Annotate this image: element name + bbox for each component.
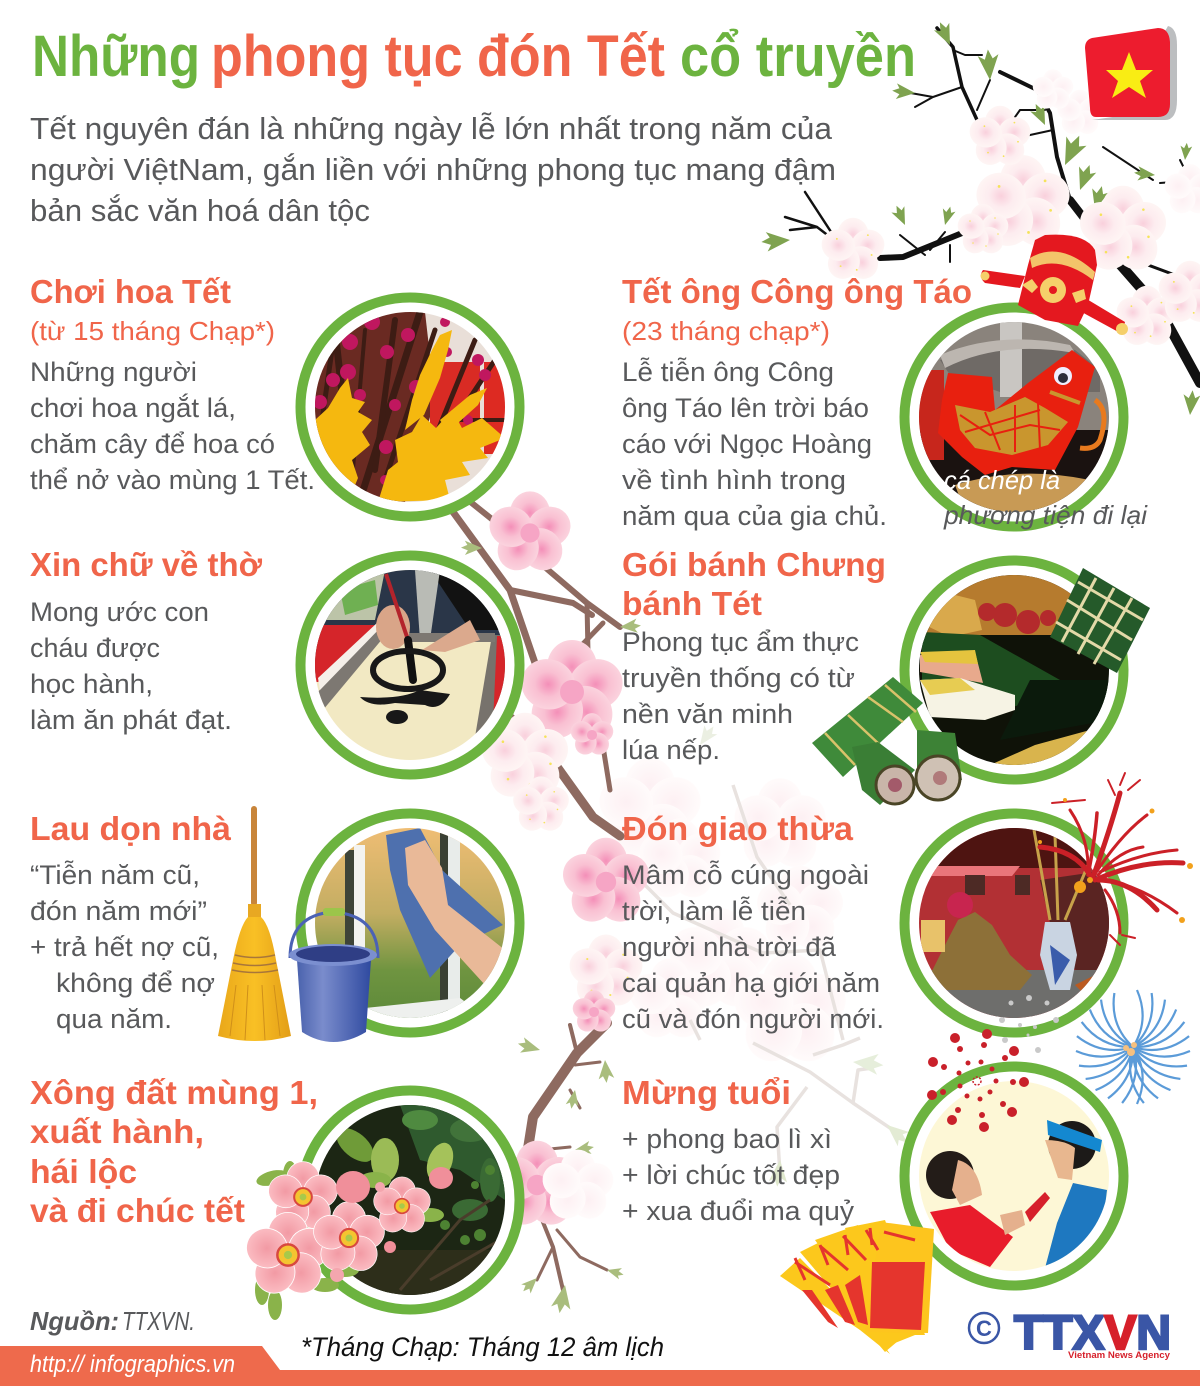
section: Lau dọn nhà: Lau dọn nhà <box>30 810 232 847</box>
section: Tết ông Công ông Táo: về tình hình trong <box>622 465 846 495</box>
section: Mừng tuổi: Mừng tuổi <box>622 1074 791 1111</box>
section: Lau dọn nhà: + trả hết nợ cũ, <box>30 932 219 962</box>
section: Tết ông Công ông Táo: Lễ tiễn ông Công <box>622 357 834 387</box>
footer band: http:// infographics.vn <box>30 1351 235 1378</box>
title: Những <box>32 24 200 89</box>
illustration: pink flowers <box>241 1161 453 1320</box>
section: Gói bánh Chưng bánh Tét: lúa nếp. <box>622 735 720 765</box>
section: Xin chữ về thờ: cháu được <box>30 633 160 663</box>
section: Mừng tuổi: + lời chúc tốt đẹp <box>622 1160 840 1190</box>
icon: red hat of ông Táo <box>980 235 1128 335</box>
section: Mừng tuổi: + phong bao lì xì <box>622 1124 832 1154</box>
section: Đón giao thừa: cũ và đón người mới. <box>622 1004 884 1034</box>
section: Xông đất mùng 1: Xông đất mùng 1, <box>30 1074 318 1111</box>
section: Đón giao thừa <box>622 810 884 1034</box>
section: Xin chữ về thờ: Xin chữ về thờ <box>30 546 263 583</box>
source <box>30 1306 195 1336</box>
title: cổ truyền <box>680 24 916 89</box>
footer band <box>0 1346 1200 1386</box>
section: Xin chữ về thờ: học hành, <box>30 669 153 699</box>
photo circle: bánh chưng <box>904 560 1124 780</box>
intro text: bản sắc văn hoá dân tộc <box>30 193 370 228</box>
section: Mừng tuổi: + xua đuổi ma quỷ <box>622 1196 855 1226</box>
section: Xông đất mùng 1: xuất hành, <box>30 1113 204 1150</box>
photo circle: cá chép <box>904 308 1124 526</box>
section: Xin chữ về thờ: làm ăn phát đạt. <box>30 705 232 735</box>
illustration: grey dots burst <box>999 995 1059 1053</box>
section: Gói bánh Chưng bánh Tét: bánh Tét <box>622 585 762 622</box>
central brown blossom branch <box>437 488 655 1314</box>
section: Chơi hoa Tết: chơi hoa ngắt lá, <box>30 393 236 423</box>
illustration: red dotted firework <box>927 1029 1029 1132</box>
title <box>32 24 916 89</box>
photo circle: hái lộc <box>300 1090 520 1310</box>
section: Lau dọn nhà: không để nợ <box>56 968 215 998</box>
section: Đón giao thừa: người nhà trời đã <box>622 932 836 962</box>
section: Xông đất mùng 1: hái lộc <box>30 1153 137 1190</box>
section: Đón giao thừa: trời, làm lễ tiễn <box>622 896 806 926</box>
section: Đón giao thừa: Mâm cỗ cúng ngoài <box>622 860 869 890</box>
section: Tết ông Công ông Táo: năm qua của gia chủ. <box>622 501 887 531</box>
icon: broom <box>218 806 291 1041</box>
section: Chơi hoa Tết: Chơi hoa Tết <box>30 273 231 310</box>
section: Chơi hoa Tết: (từ 15 tháng Chạp*) <box>30 316 275 346</box>
section: Xin chữ về thờ: Mong ước con <box>30 597 209 627</box>
icon: bánh chưng square <box>1050 568 1150 673</box>
logo: TTXVN: Vietnam News Agency <box>1068 1350 1171 1361</box>
section: Tết ông Công ông Táo: ông Táo lên trời báo <box>622 393 869 423</box>
section: Gói bánh Chưng bánh Tét: Gói bánh Chưng <box>622 546 886 583</box>
black blossom branches top right <box>760 18 1200 415</box>
section: Tết ông Công ông Táo <box>622 273 972 531</box>
section: Chơi hoa Tết: Những người <box>30 357 197 387</box>
intro text: người ViệtNam, gắn liền với những phong tục mang đậm <box>30 152 836 187</box>
source: TTXVN. <box>122 1306 195 1336</box>
photo circle: đón giao thừa <box>904 814 1124 1032</box>
photo circle: hoa Tết <box>300 298 520 516</box>
caption: cá chép: cá chép là <box>944 465 1060 495</box>
illustration: red firework <box>1038 773 1193 945</box>
section: Lau dọn nhà <box>30 810 232 1034</box>
section: Gói bánh Chưng bánh Tét: truyền thống có từ <box>622 663 855 693</box>
section: Gói bánh Chưng bánh Tét: Phong tục ẩm thực <box>622 627 859 657</box>
section: Gói bánh Chưng bánh Tét <box>622 546 886 765</box>
title: phong tục đón Tết <box>211 24 665 89</box>
section: Tết ông Công ông Táo: cáo với Ngọc Hoàng <box>622 429 872 459</box>
illustration: lì xì envelopes <box>780 1220 934 1354</box>
logo: TTXVN: TTXVN <box>1014 1307 1171 1360</box>
section: Đón giao thừa: cai quản hạ giới năm <box>622 968 880 998</box>
section: Chơi hoa Tết: chăm cây để hoa có <box>30 429 275 459</box>
section: Chơi hoa Tết: thể nở vào mùng 1 Tết. <box>30 465 315 495</box>
icon: bucket <box>289 908 378 1042</box>
photo circle: lau dọn <box>300 814 520 1032</box>
section: Mừng tuổi <box>622 1074 855 1226</box>
photo circle: mừng tuổi <box>904 1066 1124 1286</box>
intro text: Tết nguyên đán là những ngày lễ lớn nhất trong năm của <box>30 111 833 146</box>
section: Tết ông Công ông Táo: (23 tháng chạp*) <box>622 316 830 346</box>
photo circle: xin chữ <box>300 556 520 774</box>
section: Xông đất mùng 1 <box>30 1074 318 1229</box>
section: Xin chữ về thờ <box>30 546 263 735</box>
section: Tết ông Công ông Táo: Tết ông Công ông Táo <box>622 273 972 310</box>
intro text <box>30 111 836 228</box>
icon: bánh tét roll and slices <box>812 677 962 805</box>
footnote: *Tháng Chạp: Tháng 12 âm lịch <box>301 1332 664 1362</box>
source: Nguồn: <box>30 1306 119 1336</box>
caption: cá chép <box>943 465 1148 530</box>
section: Lau dọn nhà: qua năm. <box>56 1004 172 1034</box>
caption: cá chép: phương tiện đi lại <box>943 500 1148 530</box>
faded blossom branch behind right column <box>593 722 913 1187</box>
section: Chơi hoa Tết <box>30 273 315 495</box>
logo: TTXVN: C <box>976 1316 992 1341</box>
section: Lau dọn nhà: đón năm mới” <box>30 896 207 926</box>
illustration: blue firework <box>1075 990 1191 1105</box>
section: Gói bánh Chưng bánh Tét: nền văn minh <box>622 699 793 729</box>
section: Lau dọn nhà: “Tiễn năm cũ, <box>30 860 200 890</box>
icon: Vietnam flag <box>1085 26 1177 120</box>
section: Xông đất mùng 1: và đi chúc tết <box>30 1192 245 1229</box>
section: Đón giao thừa: Đón giao thừa <box>622 810 854 847</box>
